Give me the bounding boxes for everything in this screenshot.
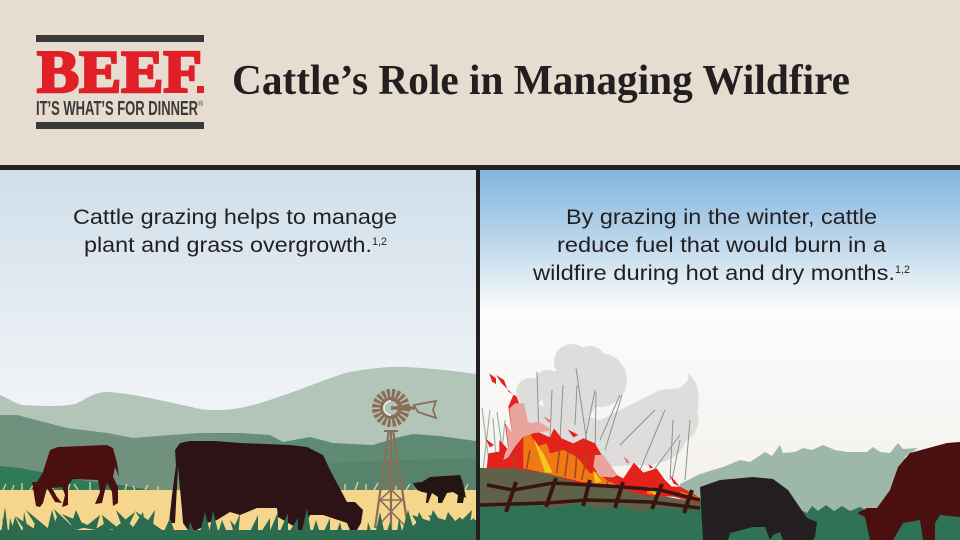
caption: right: By grazing in the winter, cattle <box>566 206 877 229</box>
caption: left: 1,2 <box>372 236 387 248</box>
lower hill band <box>320 458 476 500</box>
ground <box>480 500 960 540</box>
caption: right: reduce fuel that would burn in a <box>557 234 886 257</box>
title: Cattle’s Role in Managing Wildfire <box>232 58 850 104</box>
distant grassy hill <box>680 443 918 540</box>
caption: left: plant and grass overgrowth. <box>84 234 372 257</box>
sky <box>0 170 476 540</box>
dry grass stalks <box>537 368 690 480</box>
near grass mass right <box>416 520 476 540</box>
flame: orange core <box>523 433 620 487</box>
flame: smoke-tinted overlay <box>503 403 617 477</box>
logo: Beef It's What's For Dinner <box>36 35 204 129</box>
logo: Beef It's What's For Dinner: IT’S WHAT’S FOR DINNER <box>36 98 198 120</box>
sky <box>480 170 960 540</box>
caption: right <box>532 206 910 285</box>
cow: red foreground <box>857 442 960 540</box>
fence <box>480 478 700 513</box>
caption: right: 1,2 <box>895 264 910 276</box>
distant hills <box>0 367 476 540</box>
panel: grazing manages overgrowth <box>0 170 476 540</box>
caption: left: Cattle grazing helps to manage <box>73 206 397 229</box>
dry yellow field <box>0 490 476 540</box>
smoke clouds <box>515 344 699 468</box>
dark green slope <box>0 466 165 500</box>
logo: Beef It's What's For Dinner: BEEF <box>37 39 202 105</box>
flame lick: pink accents <box>543 416 630 463</box>
caption: right: wildfire during hot and dry months. <box>532 262 895 285</box>
caption: left <box>73 206 397 257</box>
flame: red body <box>487 375 700 503</box>
flame: yellow tips <box>533 438 657 495</box>
panel: winter grazing reduces fuel <box>480 170 960 540</box>
foreground grass <box>0 507 476 540</box>
fire <box>485 373 700 503</box>
header band <box>0 0 960 165</box>
cow: black grazing <box>700 477 817 540</box>
cow: big foreground <box>169 441 363 537</box>
panel divider <box>476 170 480 540</box>
scorched ground <box>480 468 700 512</box>
mid hills <box>0 415 476 540</box>
cow: small dark <box>413 475 466 503</box>
burnt stems in flame <box>512 447 612 485</box>
green-grey grass left <box>482 408 514 470</box>
flame licks <box>485 373 680 487</box>
windmill <box>375 394 436 532</box>
cow: red left <box>32 445 119 507</box>
logo: Beef It's What's For Dinner: ® <box>198 100 204 108</box>
field horizon tufts <box>3 481 468 490</box>
header rule <box>0 165 960 170</box>
